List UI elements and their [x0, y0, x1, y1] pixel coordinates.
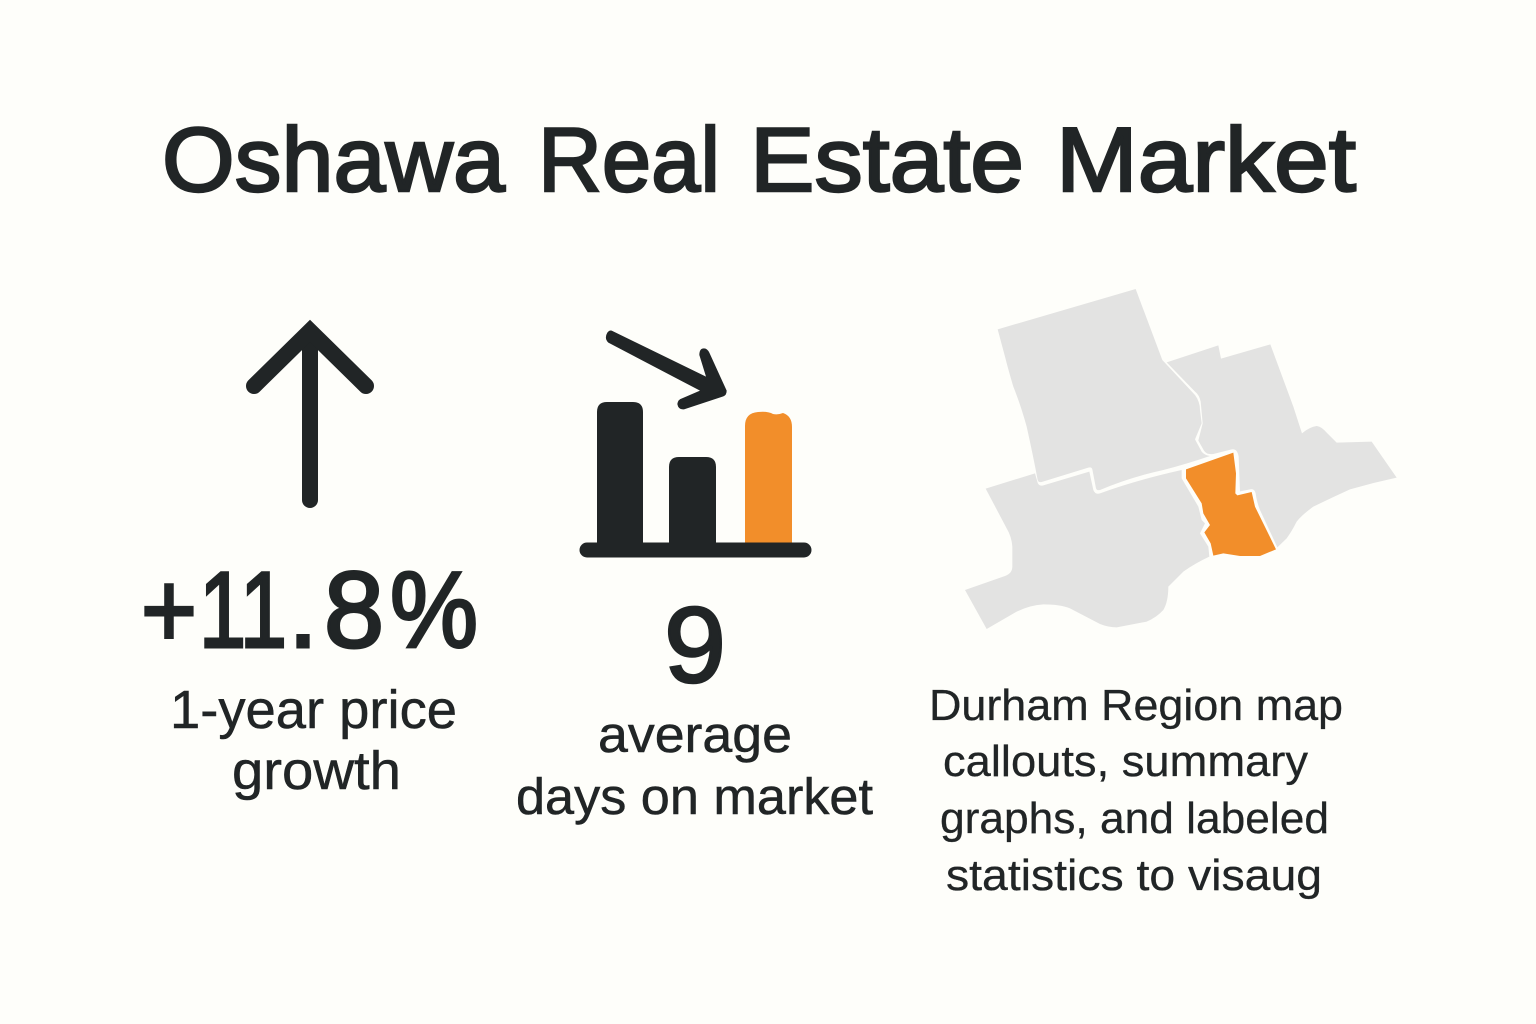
title: Real	[538, 110, 720, 211]
stat: price growth value	[141, 549, 478, 670]
title: Estate	[750, 110, 1024, 211]
panel: Durham Region map	[929, 289, 1397, 900]
text block: map caption: statistics to visaug	[946, 851, 1322, 900]
text block: map caption: graphs, and labeled	[940, 794, 1329, 843]
label: days on market: average	[598, 706, 792, 763]
panel: days on market	[516, 331, 873, 825]
stat: price growth value: .	[288, 549, 318, 670]
label: price growth: growth	[232, 741, 401, 801]
label: price growth: 1-year price	[170, 680, 457, 740]
title	[162, 110, 1356, 211]
icon: up arrow	[254, 331, 366, 500]
stat: days value: 9	[664, 584, 726, 705]
text block: map caption: callouts, summary	[943, 737, 1308, 786]
text block: map caption	[929, 681, 1343, 900]
stat: price growth value: +	[141, 549, 197, 670]
panel: price growth	[141, 331, 478, 801]
label: days on market: days on market	[516, 768, 873, 825]
stat: price growth value: 11	[199, 549, 287, 670]
title: Market	[1056, 110, 1356, 211]
text block: map caption: Durham Region map	[929, 681, 1343, 730]
icon: bar chart with down arrow	[587, 331, 804, 550]
map: Durham Region	[965, 289, 1397, 629]
title: Oshawa	[162, 110, 505, 211]
label: days on market	[516, 706, 873, 825]
stat: price growth value: 8	[324, 549, 384, 670]
stat: price growth value: %	[390, 549, 478, 670]
label: price growth	[170, 680, 457, 801]
